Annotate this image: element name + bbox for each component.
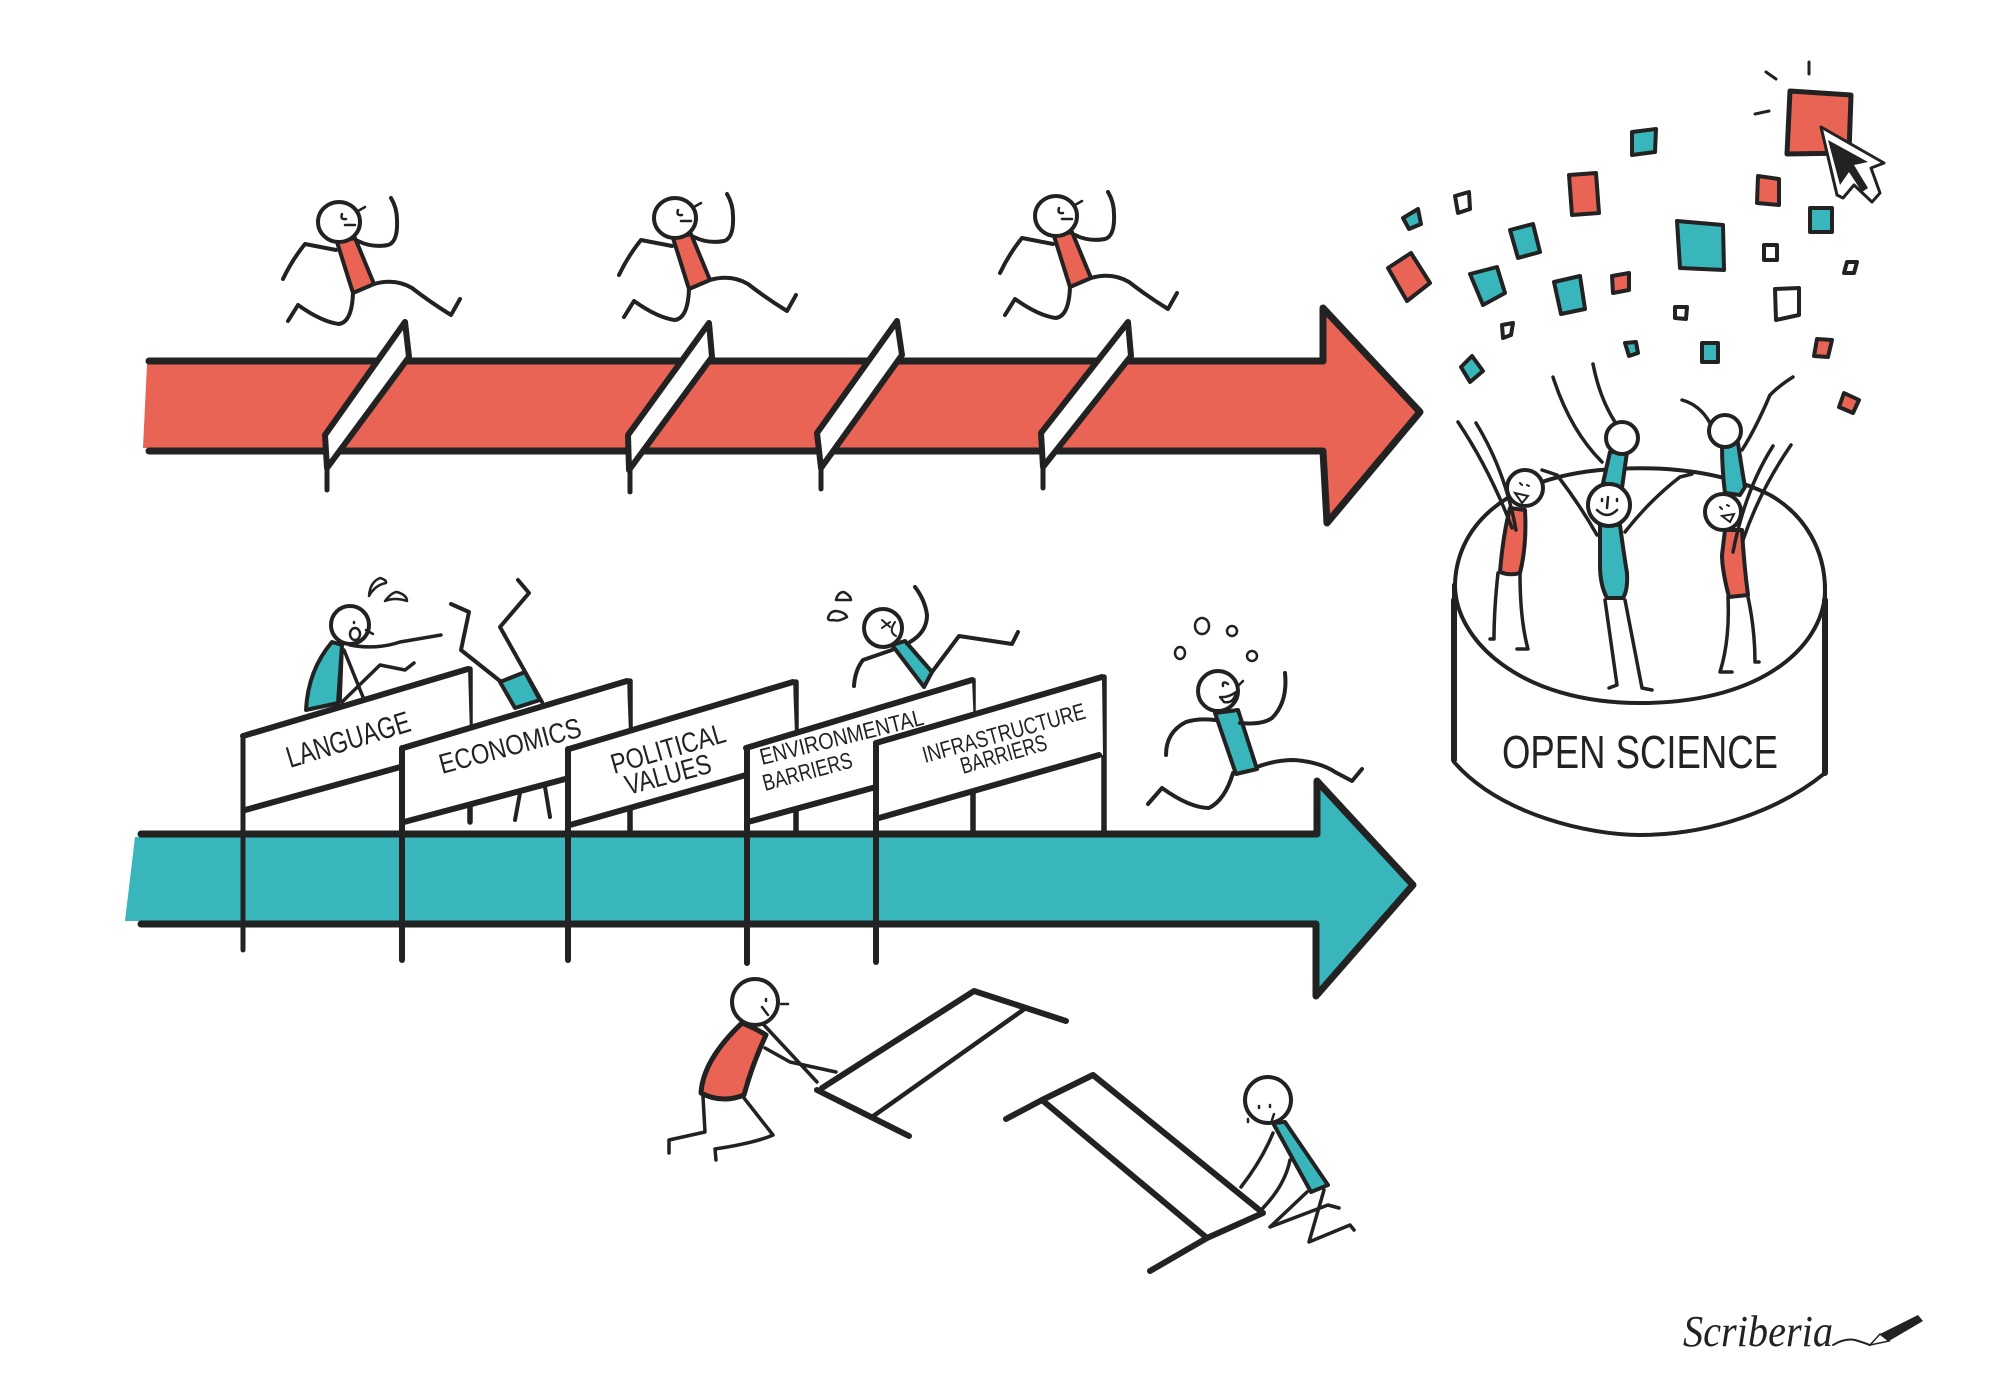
sign: infrastructure barriers: BARRIERS xyxy=(957,729,1050,779)
flattened hurdle left xyxy=(817,991,1066,1136)
happy teal runner xyxy=(1148,671,1362,808)
sign: infrastructure barriers xyxy=(876,677,1103,962)
sign: infrastructure barriers: INFRASTRUCTURE xyxy=(919,698,1088,768)
signature: Scriberia with pencil xyxy=(1683,1307,1923,1356)
person: back teal, centre xyxy=(1553,364,1638,488)
sign: language xyxy=(243,669,470,950)
runner 1 xyxy=(283,198,460,324)
sign: political values: POLITICAL xyxy=(607,717,729,780)
person: right red cheering xyxy=(1705,445,1791,672)
upside-down figure legs behind signs xyxy=(451,580,550,820)
sign: economics xyxy=(402,681,630,960)
sign: economics: ECONOMICS xyxy=(436,712,585,780)
signature: Scriberia with pencil: Scriberia xyxy=(1683,1307,1833,1356)
icon: mouse cursor xyxy=(1821,127,1884,202)
runner 3 xyxy=(1000,192,1177,318)
sign: political values xyxy=(568,682,796,960)
person: back teal, right xyxy=(1682,377,1793,495)
hurdle 1 on red arrow xyxy=(325,322,409,490)
cylinder label: OPEN SCIENCE xyxy=(1502,726,1778,778)
sign: language: LANGUAGE xyxy=(282,706,414,775)
sign: environmental barriers: BARRIERS xyxy=(760,747,855,796)
runner 2 xyxy=(619,194,796,320)
person: left red cheering xyxy=(1458,422,1543,649)
flattened hurdle right xyxy=(1006,1075,1263,1271)
figure stumbling over language sign xyxy=(306,606,441,710)
teal figure lifting hurdle xyxy=(1241,1077,1354,1242)
sign: environmental barriers: ENVIRONMENTAL xyxy=(757,704,926,770)
joy bubbles xyxy=(1175,618,1257,661)
confetti squares xyxy=(1388,129,1859,413)
clicked red square with sparkle ticks xyxy=(1755,62,1851,154)
hurdle 2 on red arrow xyxy=(628,323,712,492)
teal arrow xyxy=(125,781,1413,996)
hurdle 3 on red arrow xyxy=(817,321,902,489)
red arrow xyxy=(143,308,1420,523)
rear sign posts xyxy=(470,669,1104,834)
sweat drops, environmental figure xyxy=(828,592,851,621)
sign: political values: VALUES xyxy=(622,748,715,801)
hurdle 4 on red arrow xyxy=(1041,322,1131,488)
sweat drops, language figure xyxy=(369,578,407,601)
figure stumbling over environmental sign xyxy=(854,587,1018,687)
open science cylinder xyxy=(1454,468,1825,835)
sign: environmental barriers xyxy=(746,680,975,963)
red figure pushing hurdle down xyxy=(669,979,836,1160)
person: centre teal cheering xyxy=(1542,470,1692,690)
